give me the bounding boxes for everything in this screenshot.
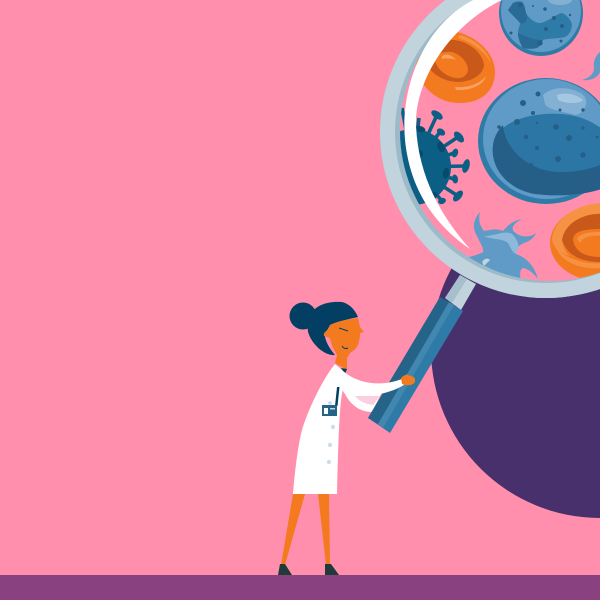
coat buttons bbox=[327, 425, 335, 464]
floor band bbox=[0, 575, 600, 600]
small blue cell fragment bbox=[582, 52, 600, 80]
lanyard bbox=[335, 387, 340, 406]
arm sleeve bbox=[341, 370, 404, 396]
purple background circle bbox=[431, 180, 600, 518]
hair bbox=[308, 302, 358, 355]
lens interior with cells bbox=[400, 0, 600, 281]
magnifying glass handle bbox=[368, 275, 476, 433]
hair bun bbox=[290, 302, 316, 330]
scientist bbox=[278, 302, 415, 575]
back sleeve of lab coat bbox=[344, 392, 382, 412]
ID badge bbox=[322, 401, 337, 416]
eye bbox=[339, 328, 348, 331]
right leg bbox=[318, 494, 330, 565]
white lens glare crescent bbox=[404, 0, 502, 249]
right shoe bbox=[325, 564, 339, 575]
red blood cell: upper left bbox=[415, 32, 495, 103]
pink shadow inside sleeve bbox=[355, 396, 380, 405]
magnifying glass ring bbox=[380, 0, 600, 298]
left shoe bbox=[278, 564, 292, 575]
cell: top blue cell bbox=[499, 0, 583, 56]
collar bbox=[341, 368, 347, 374]
red blood cell: lower right bbox=[550, 203, 600, 281]
neck and face bbox=[324, 318, 364, 370]
hand bbox=[401, 375, 415, 385]
smile bbox=[342, 346, 348, 349]
lens inner shadow strip bbox=[380, 0, 600, 298]
lab coat bbox=[293, 364, 345, 494]
left leg bbox=[281, 494, 305, 565]
amoeba cell bbox=[466, 212, 538, 282]
virus bbox=[400, 108, 470, 204]
large blue cell bbox=[478, 78, 600, 204]
